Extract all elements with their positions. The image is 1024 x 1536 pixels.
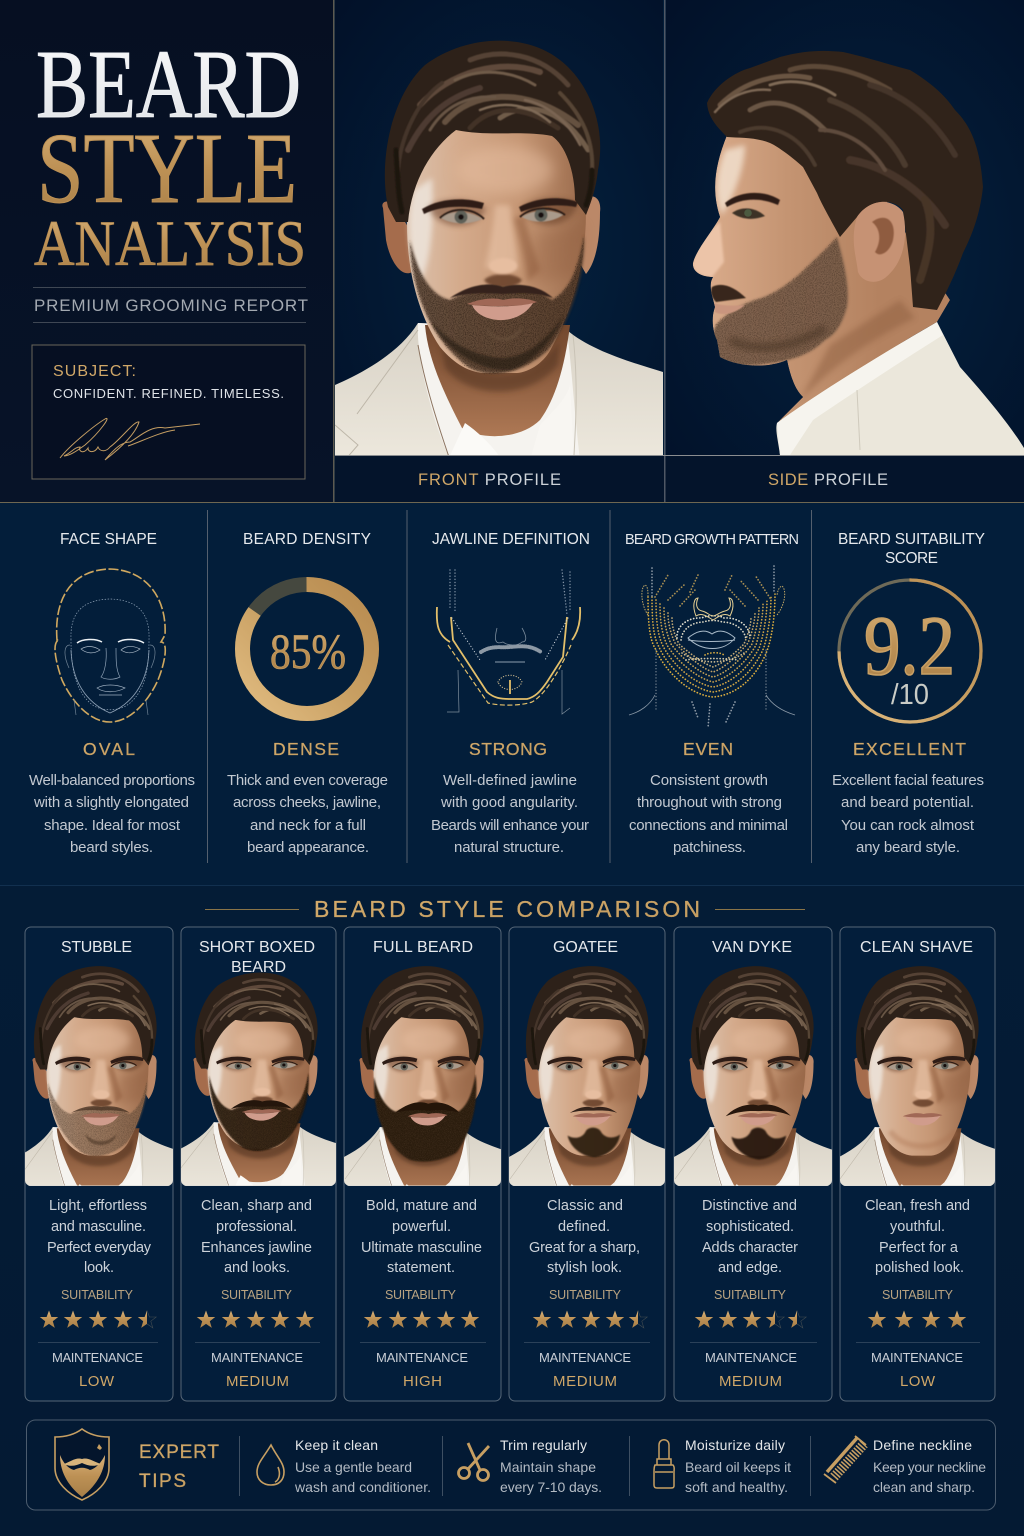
panel: van dyke: VAN DYKE	[712, 939, 792, 956]
rating: stars	[695, 1310, 806, 1328]
metric: jawline: JAWLINE DEFINITION	[432, 531, 590, 548]
panel: full beard: Ultimate masculine	[361, 1240, 482, 1256]
panel: stubble: LOW	[79, 1373, 115, 1390]
panel: full beard: statement.	[387, 1260, 455, 1276]
panel: van dyke	[674, 926, 832, 1402]
panel: stubble: and masculine.	[51, 1219, 146, 1235]
metric: face shape: FACE SHAPE	[60, 531, 157, 548]
rating: stars	[197, 1310, 314, 1328]
panel: van dyke: Adds character	[702, 1240, 798, 1256]
metric: beard density: and neck for a full	[250, 817, 366, 834]
tip: trim regularly: every 7-10 days.	[500, 1479, 602, 1495]
metric: growth pattern	[625, 532, 799, 856]
metric: face shape: with a slightly elongated	[33, 794, 189, 811]
tip: trim regularly	[458, 1437, 602, 1495]
metric: suitability score: and beard potential.	[841, 794, 974, 811]
metric: suitability score: 9.2	[864, 599, 955, 693]
heading: expert tips: EXPERT	[139, 1442, 219, 1463]
panel: stubble: Light, effortless	[49, 1198, 147, 1214]
metric: jawline: STRONG	[469, 739, 547, 759]
tip: define neckline	[824, 1436, 986, 1495]
icon: oval face	[55, 569, 165, 722]
metric: beard density: Thick and even coverage	[227, 772, 388, 789]
panel: goatee: MAINTENANCE	[539, 1350, 631, 1365]
heading: expert tips: TIPS	[139, 1471, 186, 1492]
subject box	[32, 345, 305, 479]
panel: short boxed beard: Enhances jawline	[201, 1240, 312, 1256]
metric: beard density: across cheeks, jawline,	[233, 794, 381, 811]
panel: goatee: defined.	[558, 1219, 610, 1235]
icon: drop	[257, 1445, 284, 1485]
tip: define neckline: clean and sharp.	[873, 1479, 975, 1495]
metric: face shape	[29, 531, 195, 856]
panel: short boxed beard: SHORT BOXED	[199, 939, 315, 956]
tip: trim regularly: Trim regularly	[500, 1437, 587, 1453]
panel: clean shave: MAINTENANCE	[871, 1350, 963, 1365]
panel: clean shave: Perfect for a	[879, 1240, 959, 1256]
metric: face shape: OVAL	[83, 739, 135, 759]
panel: short boxed beard	[180, 926, 336, 1402]
panel: van dyke: SUITABILITY	[714, 1288, 787, 1302]
panel: stubble: SUITABILITY	[61, 1288, 134, 1302]
panel: short boxed beard: MAINTENANCE	[211, 1350, 303, 1365]
metric: suitability score: You can rock almost	[841, 817, 975, 834]
panel: expert tips	[26, 1420, 996, 1510]
panel: full beard: Bold, mature and	[366, 1198, 477, 1214]
panel: clean shave: polished look.	[875, 1260, 964, 1276]
panel: goatee: stylish look.	[547, 1260, 622, 1276]
tip: define neckline: Define neckline	[873, 1437, 972, 1453]
metric: face shape: beard styles.	[70, 839, 153, 856]
heading: expert tips	[139, 1442, 219, 1492]
tip: moisturize daily: Moisturize daily	[685, 1437, 785, 1453]
panel: van dyke: Distinctive and	[702, 1198, 797, 1214]
panel: title	[0, 0, 333, 502]
metric: face shape: Well-balanced proportions	[29, 772, 195, 789]
caption: front profile: FRONT PROFILE	[418, 471, 561, 489]
panel: metrics	[0, 503, 1024, 885]
subject box: SUBJECT:	[53, 363, 136, 380]
metric: growth pattern: Consistent growth	[650, 772, 768, 789]
panel: van dyke: sophisticated.	[706, 1219, 794, 1235]
panel: full beard: powerful.	[392, 1219, 451, 1235]
panel: short boxed beard: Clean, sharp and	[201, 1198, 312, 1214]
tip: moisturize daily: Beard oil keeps it	[685, 1459, 791, 1475]
metric: jawline: Beards will enhance your	[431, 817, 589, 834]
panel: clean shave: LOW	[900, 1373, 936, 1390]
metric: suitability score: SCORE	[885, 550, 938, 567]
panel: stubble: Perfect everyday	[47, 1240, 152, 1256]
metric: beard density: DENSE	[273, 739, 339, 759]
panel: full beard: MAINTENANCE	[376, 1350, 468, 1365]
panel: stubble: look.	[84, 1260, 114, 1276]
icon: comb	[824, 1436, 866, 1483]
panel: short boxed beard: MEDIUM	[226, 1373, 289, 1390]
panel: goatee: Classic and	[547, 1198, 623, 1214]
heading: beard: BEARD	[36, 31, 301, 138]
icon: bottle	[654, 1440, 674, 1488]
metric: growth pattern: BEARD GROWTH PATTERN	[625, 532, 799, 548]
panel: short boxed beard: professional.	[216, 1219, 297, 1235]
rating: stars	[868, 1310, 966, 1328]
tip: keep it clean: wash and conditioner.	[294, 1479, 431, 1495]
panel: goatee: GOATEE	[553, 939, 618, 956]
panel: short boxed beard: BEARD	[231, 959, 286, 976]
metric: growth pattern: connections and minimal	[629, 817, 788, 834]
rating: stars	[533, 1310, 647, 1328]
metric: growth pattern: EVEN	[683, 739, 733, 759]
photo: front profile	[335, 0, 663, 460]
heading: comparison: BEARD STYLE COMPARISON	[314, 896, 700, 922]
rating: stars	[364, 1310, 479, 1328]
panel: clean shave: SUITABILITY	[882, 1288, 954, 1302]
panel: goatee: SUITABILITY	[549, 1288, 622, 1302]
tip: keep it clean	[257, 1437, 431, 1495]
metric: suitability score: Excellent facial features	[832, 772, 984, 789]
icon: signature	[60, 418, 200, 460]
metric: beard density: 85%	[270, 623, 346, 679]
heading: style: STYLE	[37, 112, 297, 224]
metric: beard density: beard appearance.	[247, 839, 369, 856]
panel: goatee: Great for a sharp,	[529, 1240, 640, 1256]
tip: define neckline: Keep your neckline	[873, 1459, 986, 1475]
chart: density ring	[242, 584, 372, 714]
metric: growth pattern: throughout with strong	[637, 794, 782, 811]
divider lines	[333, 0, 666, 502]
photo: side profile	[666, 0, 1024, 455]
metric: beard density: BEARD DENSITY	[243, 531, 371, 548]
metric: jawline: Well-defined jawline	[443, 772, 577, 789]
metric: suitability score: EXCELLENT	[853, 739, 966, 759]
panel: van dyke: and edge.	[718, 1260, 782, 1276]
subtitle: PREMIUM GROOMING REPORT	[34, 296, 308, 315]
heading: analysis: ANALYSIS	[34, 208, 306, 280]
caption strip	[335, 455, 1024, 502]
panel: short boxed beard: SUITABILITY	[221, 1288, 293, 1302]
metric: suitability score	[832, 531, 985, 856]
panel: clean shave: CLEAN SHAVE	[860, 939, 973, 956]
tip: keep it clean: Use a gentle beard	[295, 1459, 412, 1475]
tip: trim regularly: Maintain shape	[500, 1459, 596, 1475]
panel: short boxed beard: and looks.	[224, 1260, 290, 1276]
metric: suitability score: any beard style.	[856, 839, 960, 856]
metric: jawline: with good angularity.	[440, 794, 578, 811]
icon: shield	[55, 1429, 109, 1500]
panel: van dyke: MEDIUM	[719, 1373, 782, 1390]
panel: stubble: STUBBLE	[61, 939, 132, 956]
icon: jawline diagram	[437, 570, 580, 714]
metric: beard density	[227, 531, 388, 856]
tip: keep it clean: Keep it clean	[295, 1437, 378, 1453]
panel: full beard: FULL BEARD	[373, 939, 473, 956]
chart: score ring	[839, 580, 981, 722]
tip: moisturize daily	[654, 1437, 791, 1495]
panel: clean shave: Clean, fresh and	[865, 1198, 970, 1214]
panel: van dyke: MAINTENANCE	[705, 1350, 797, 1365]
panel: clean shave: youthful.	[890, 1219, 945, 1235]
panel: clean shave	[840, 926, 996, 1402]
metric: face shape: shape. Ideal for most	[44, 817, 181, 834]
metric: jawline: natural structure.	[454, 839, 564, 856]
panel: goatee	[508, 926, 666, 1402]
icon: scissors	[458, 1443, 489, 1480]
panel: stubble: MAINTENANCE	[52, 1350, 143, 1365]
subject box: CONFIDENT. REFINED. TIMELESS.	[53, 386, 284, 401]
panel: full beard: SUITABILITY	[385, 1288, 457, 1302]
metric: jawline	[431, 531, 590, 856]
panel: full beard	[344, 926, 502, 1402]
caption: side profile: SIDE PROFILE	[768, 471, 888, 489]
metric: suitability score: /10	[891, 679, 929, 711]
panel: stubble	[24, 926, 174, 1402]
tip: moisturize daily: soft and healthy.	[685, 1479, 788, 1495]
icon: growth dots	[648, 566, 775, 728]
panel: full beard: HIGH	[403, 1373, 442, 1390]
rating: stars	[40, 1310, 156, 1328]
metric: suitability score: BEARD SUITABILITY	[838, 531, 985, 548]
panel: goatee: MEDIUM	[553, 1373, 617, 1390]
metric: growth pattern: patchiness.	[673, 839, 746, 856]
